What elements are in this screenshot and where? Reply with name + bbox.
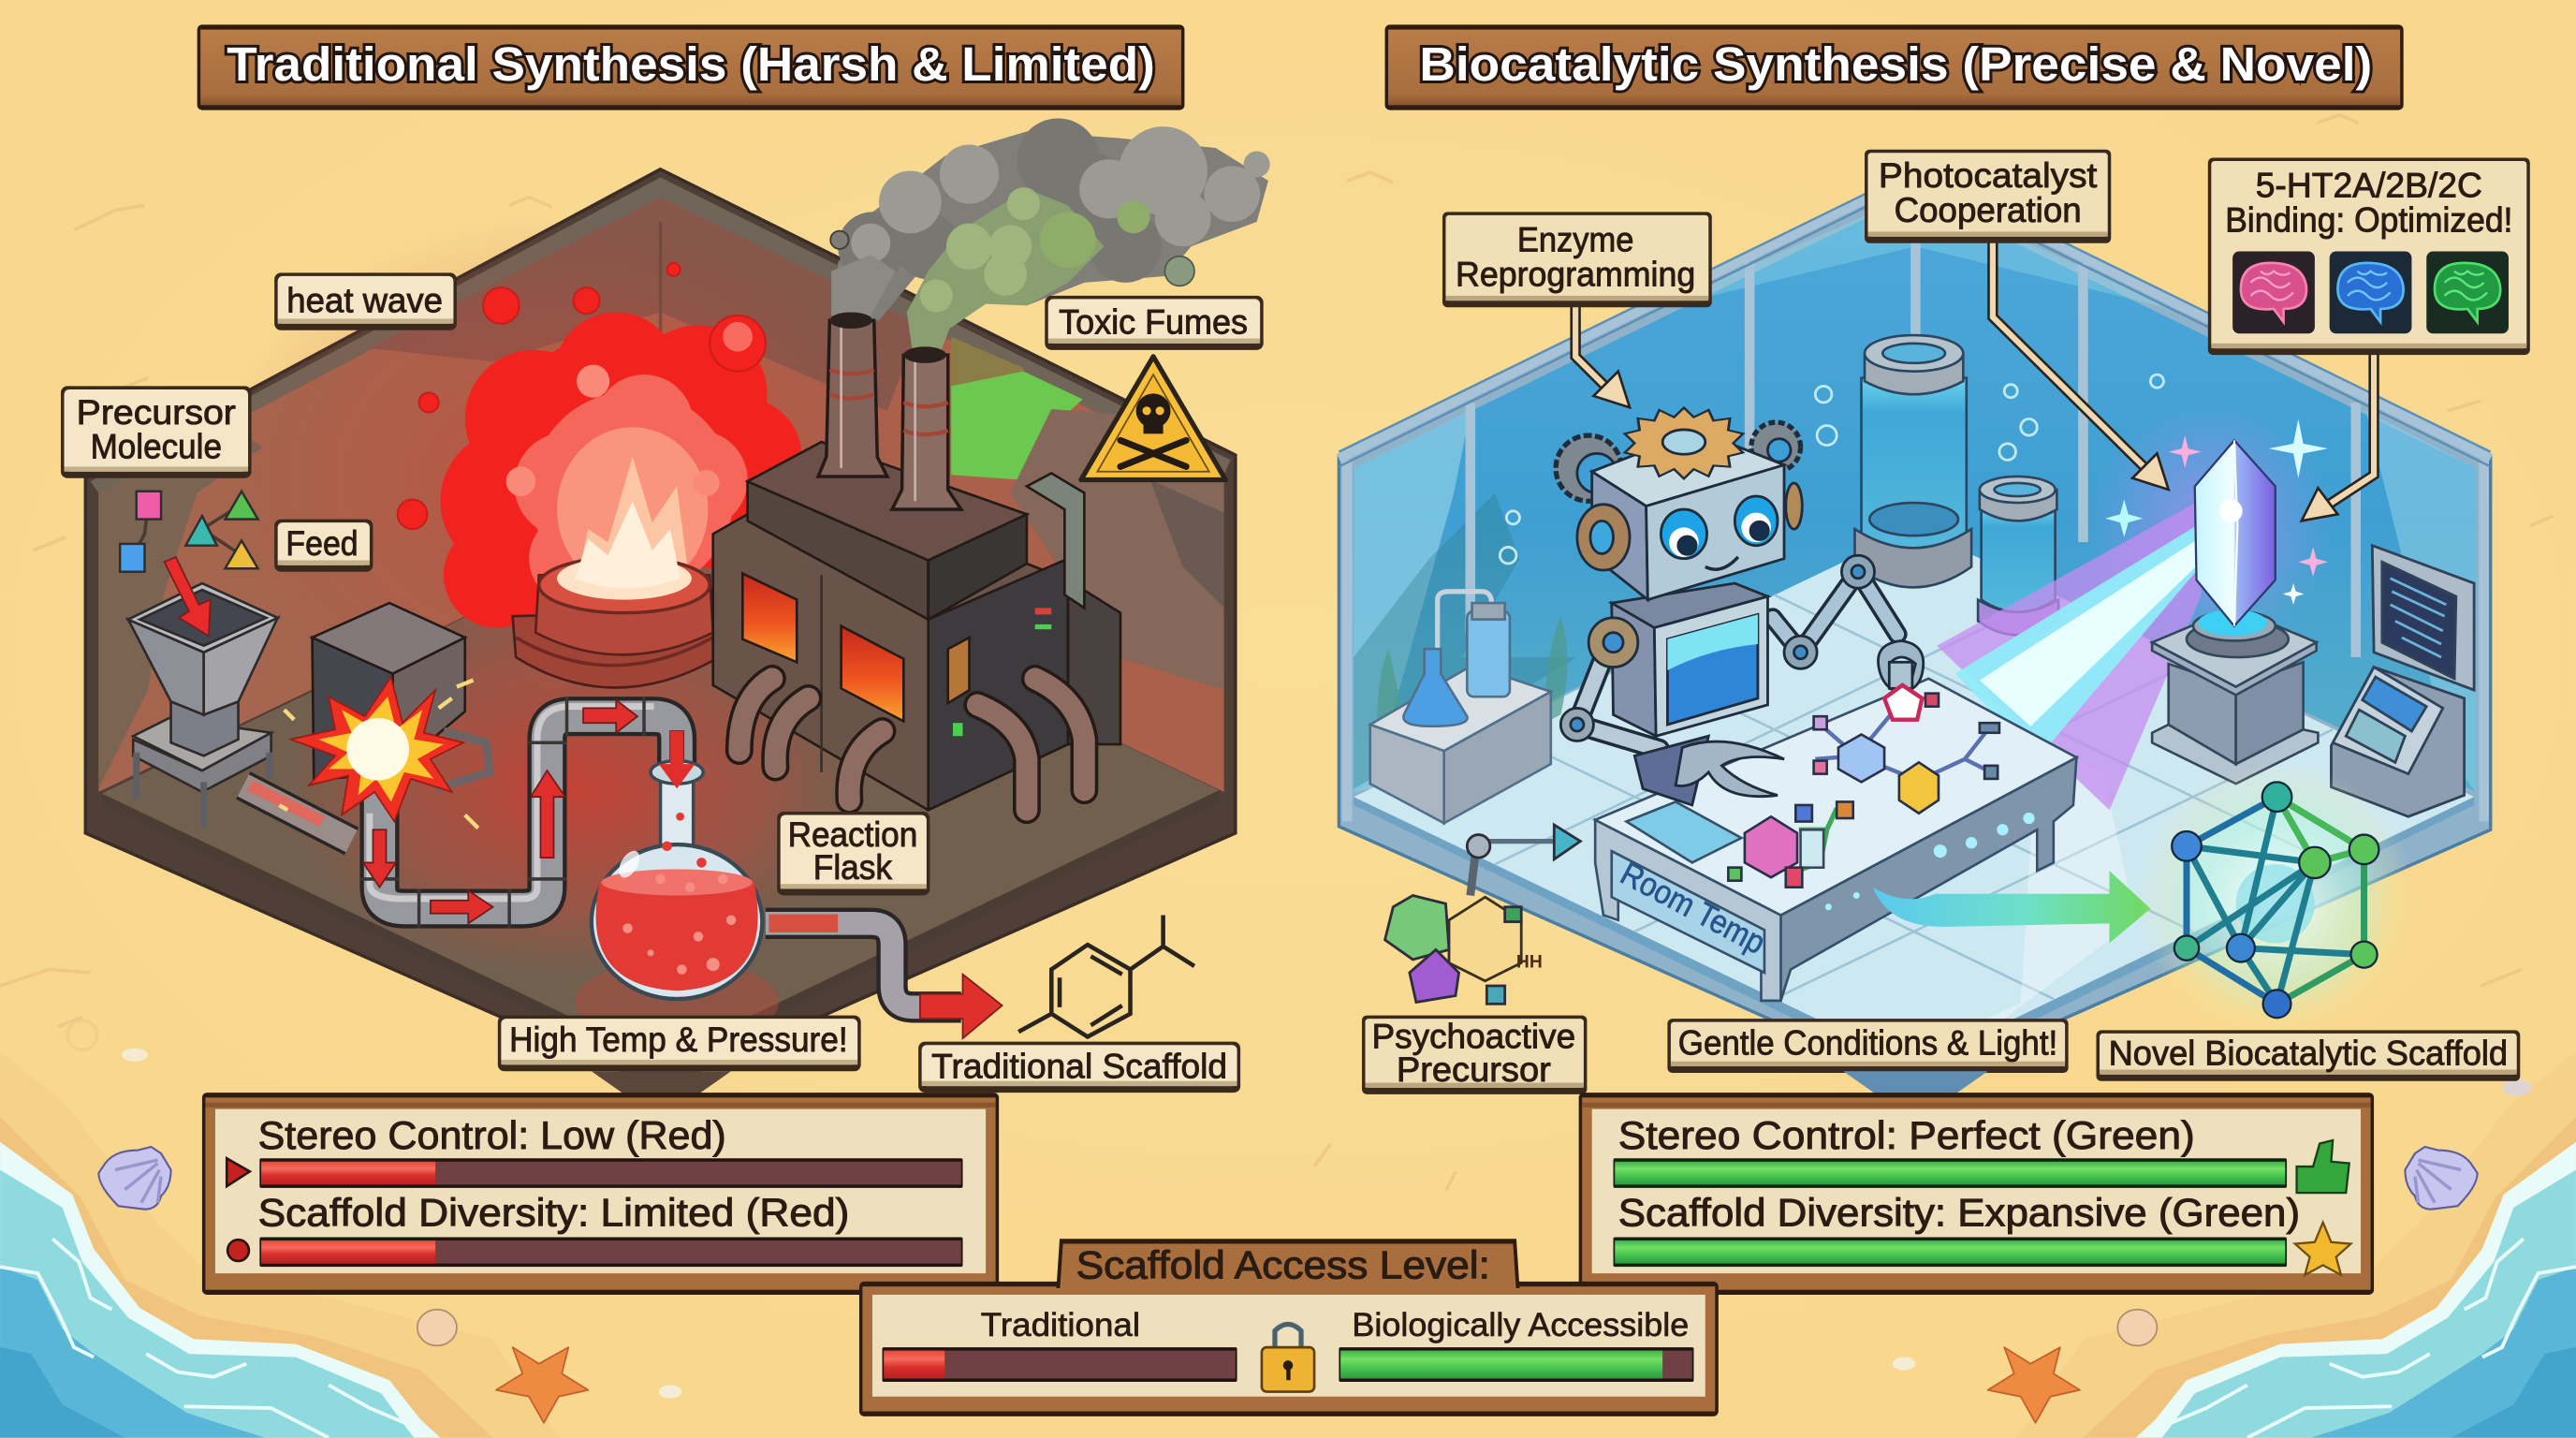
factory pipes <box>739 679 1084 810</box>
icon: starfish left <box>496 1347 588 1423</box>
green smoke mass <box>907 189 1104 359</box>
icon: small shell right <box>2117 1310 2157 1345</box>
pebble left <box>659 1385 681 1399</box>
bubbles in water <box>1500 374 2163 564</box>
room shell <box>1339 172 2491 1084</box>
hopper with feed pipe <box>128 583 278 827</box>
top gear <box>1625 407 1743 478</box>
label: toxic fumes <box>1045 296 1264 350</box>
label: precursor molecule: Molecule <box>91 428 222 466</box>
icon: gold star <box>2295 1223 2351 1275</box>
traditional access text: Traditional <box>981 1307 1140 1343</box>
stack 1 <box>818 320 887 477</box>
label: enzyme reprogramming with arrow <box>1442 212 1712 407</box>
label: receptor binding with brain icons <box>2208 157 2530 521</box>
compressor box <box>313 603 490 788</box>
helper robot <box>1556 407 1924 805</box>
room stand connector left <box>592 1071 731 1094</box>
title board: traditional synthesis: Traditional Synthesis (Harsh & Limited) <box>227 37 1155 91</box>
title board: traditional synthesis <box>198 24 1184 110</box>
label: psychoactive precursor <box>1362 1016 1587 1094</box>
title board: biocatalytic synthesis <box>1385 24 2404 110</box>
lower claw <box>1676 741 1784 797</box>
icon: right shell <box>2405 1147 2478 1210</box>
ear gear <box>1577 505 1630 570</box>
seaweed and silhouettes <box>1377 616 1567 772</box>
room temp label: Room Temp <box>1615 855 1771 961</box>
label: receptor binding with brain icons: 5-HT2A/2B/2C <box>2256 167 2482 205</box>
legs <box>1634 736 1708 805</box>
red feed arrow <box>165 557 211 636</box>
label: traditional scaffold <box>918 1042 1240 1093</box>
lab table <box>1595 679 2076 1001</box>
label: toxic fumes: Toxic Fumes <box>1059 302 1248 341</box>
ocean bottom left <box>0 1051 559 1438</box>
label: high temp and pressure <box>498 1016 861 1071</box>
output pipe and arrow <box>766 923 1003 1038</box>
traditional access bar <box>883 1347 1237 1382</box>
psychoactive precursor molecule: HH <box>1516 953 1543 973</box>
lab bench with flask <box>1370 592 1551 823</box>
glass walls <box>1354 194 2476 792</box>
body <box>1612 603 1656 736</box>
glass cylinder tall <box>1854 335 1971 587</box>
panel: traditional metrics <box>202 1093 999 1295</box>
stereo control low text: Stereo Control: Low (Red) <box>258 1113 726 1157</box>
factory building <box>713 442 1120 810</box>
label: enzyme reprogramming with arrow: Reprogramming <box>1456 255 1695 293</box>
label: photocatalyst cooperation with arrow <box>1865 150 2169 490</box>
floating molecules on table <box>1814 685 1999 814</box>
sparkles <box>2105 419 2328 605</box>
title board: biocatalytic synthesis: Biocatalytic Synthesis (Precise & Novel) <box>1419 37 2372 91</box>
heat glow on wall <box>213 213 903 740</box>
novel biocatalytic scaffold cage <box>2139 762 2415 1038</box>
icon: pink brain <box>2232 252 2315 333</box>
label: feed <box>274 520 373 572</box>
label: gentle conditions and light: Gentle Conditions & Light! <box>1678 1024 2057 1063</box>
green transformation arrow <box>1873 871 2150 943</box>
icon: starfish right <box>1988 1347 2080 1423</box>
monitor and console <box>2331 546 2474 816</box>
frame <box>1339 174 2491 822</box>
icon: green brain <box>2426 252 2509 333</box>
back walls <box>98 198 661 792</box>
warning sign <box>1081 357 1225 479</box>
light beam <box>1937 403 2333 810</box>
label: reaction flask: Flask <box>813 848 893 887</box>
icon: red pointer <box>227 1158 250 1186</box>
side gears <box>1556 435 1621 501</box>
beach decorations <box>98 1147 2478 1423</box>
icon: blue brain <box>2330 252 2411 333</box>
label: psychoactive precursor: Precursor <box>1397 1050 1551 1089</box>
glass cylinder small <box>1978 477 2058 635</box>
head <box>1592 431 1784 506</box>
label: heat wave <box>274 272 457 330</box>
panel: biocatalytic metrics <box>1579 1093 2374 1295</box>
pebble right <box>1893 1357 1915 1371</box>
stereo control perfect bar <box>1613 1158 2287 1188</box>
panel: scaffold access level <box>859 1239 1719 1416</box>
grey smoke mass <box>835 131 1268 320</box>
traditional scaffold molecule <box>1018 916 1194 1036</box>
explosion burst <box>279 677 478 829</box>
scaffold diversity limited bar <box>259 1238 963 1267</box>
stereo control perfect text: Stereo Control: Perfect (Green) <box>1618 1113 2195 1157</box>
scaffold diversity expansive text: Scaffold Diversity: Expansive (Green) <box>1618 1190 2300 1234</box>
label: novel biocatalytic scaffold: Novel Biocatalytic Scaffold <box>2109 1034 2508 1072</box>
label: traditional scaffold: Traditional Scaffold <box>931 1047 1227 1085</box>
left isometric reactor room <box>85 169 1236 1088</box>
ocean bottom right <box>2017 1051 2576 1438</box>
label: reaction flask: Reaction <box>788 815 917 854</box>
molecule feed icons <box>120 492 258 572</box>
scaffold diversity expansive bar <box>1613 1238 2287 1267</box>
biologically accessible text: Biologically Accessible <box>1352 1307 1689 1343</box>
psychoactive precursor molecule <box>1385 825 1580 1004</box>
label: precursor molecule <box>61 386 252 478</box>
tab heading: Scaffold Access Level: <box>1076 1242 1490 1286</box>
label: heat wave: heat wave <box>286 281 443 319</box>
crystal <box>2105 419 2328 626</box>
pedestal <box>2152 608 2318 784</box>
room shell <box>85 169 1236 1088</box>
icon: thumbs up <box>2297 1140 2349 1193</box>
label: enzyme reprogramming with arrow: Enzyme <box>1517 221 1633 259</box>
icon: padlock <box>1262 1325 1314 1392</box>
pink molecule on table <box>1728 801 1853 888</box>
label: photocatalyst cooperation with arrow: Photocatalyst <box>1879 156 2097 195</box>
tab heading <box>1057 1239 1519 1293</box>
label: photocatalyst cooperation with arrow: Cooperation <box>1895 191 2082 229</box>
icon: left shell <box>98 1147 171 1210</box>
eyes <box>1661 509 1707 559</box>
right isometric biolab room <box>1339 169 2491 1084</box>
scaffold diversity limited text: Scaffold Diversity: Limited (Red) <box>258 1190 849 1234</box>
label: receptor binding with brain icons: Binding: Optimized! <box>2225 200 2512 239</box>
robot arms <box>1577 572 1897 749</box>
floor <box>102 522 1219 1060</box>
label: high temp and pressure: High Temp & Pressure! <box>509 1020 848 1059</box>
stereo control low bar <box>259 1158 963 1188</box>
reaction flask <box>592 731 762 999</box>
factory smokestacks with smoke <box>818 118 1270 509</box>
stack 2 <box>892 355 961 509</box>
sand ripples <box>0 115 2553 1273</box>
biologically accessible bar <box>1339 1347 1693 1382</box>
pipe flow arrows <box>363 700 695 923</box>
label: feed: Feed <box>285 524 359 563</box>
label: gentle conditions and light <box>1667 1019 2069 1073</box>
furnace vessel <box>513 501 713 688</box>
heat wave cloud <box>398 263 802 647</box>
connecting pipes <box>243 697 677 929</box>
label: precursor molecule: Precursor <box>77 393 236 432</box>
label: psychoactive precursor: Psychoactive <box>1372 1018 1575 1056</box>
label: reaction flask <box>777 812 929 895</box>
icon: small shell left <box>417 1310 457 1345</box>
room stand connector right <box>1843 1071 1988 1094</box>
icon: red dot <box>227 1240 249 1261</box>
floor <box>1354 527 2474 1066</box>
table lights <box>1825 813 2035 910</box>
